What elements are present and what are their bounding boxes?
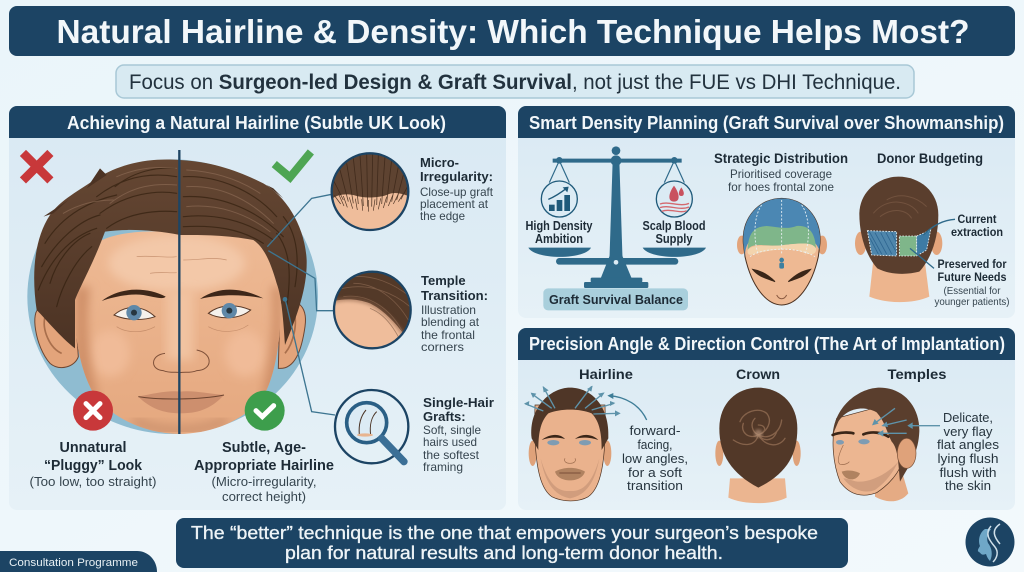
icon: scalp blood supply (656, 181, 692, 217)
inset: temple transition (332, 270, 413, 350)
illustration: crown head (715, 388, 801, 503)
title banner (9, 6, 1015, 56)
conclusion banner: plan for natural results and long-term donor health. (285, 542, 723, 563)
text: delicate flat angles: very flay (944, 425, 993, 439)
text: temple transition: blending at (421, 315, 480, 329)
illustration: top-down head zones (737, 198, 827, 305)
text: forward-facing: facing, (638, 438, 672, 452)
text: single-hair grafts: framing (423, 460, 463, 474)
label: preserved for future needs: Preserved for (938, 257, 1007, 271)
illustration: temples head (833, 388, 940, 501)
illustration: balance scale (528, 146, 955, 310)
caption: subtle hairline: correct height) (222, 490, 306, 504)
icon: green check badge (245, 391, 285, 431)
icon: red cross top (26, 156, 47, 177)
text: forward-facing: forward- (630, 424, 680, 438)
text: strategic distribution (714, 151, 848, 194)
inset: micro-irregularity (330, 150, 410, 232)
label: graft survival balance: Graft Survival Balance (549, 292, 683, 307)
label: hairline: Hairline (579, 367, 634, 382)
text: micro-irregularity (420, 155, 494, 223)
text: delicate flat angles (937, 411, 999, 493)
text: single-hair grafts (423, 395, 494, 474)
text: single-hair grafts: the softest (423, 448, 480, 462)
text: temple transition: the frontal (421, 328, 475, 342)
icon: red cross badge (73, 391, 113, 431)
text: micro-irregularity: Close-up graft (420, 185, 494, 199)
text: forward-facing: transition (627, 479, 683, 493)
tab: consultation programme (0, 551, 157, 572)
inset: single-hair grafts magnifier (335, 390, 408, 463)
text: temple transition (421, 273, 488, 354)
heading: natural hairline: Achieving a Natural Hairline (Subtle UK Look) (67, 112, 446, 133)
text: delicate flat angles: the skin (945, 479, 991, 493)
label: high density ambition: Ambition (535, 232, 583, 246)
pill: graft survival balance (543, 288, 688, 310)
subtitle pill: Focus on Surgeon-led Design & Graft Survival, not just the FUE vs DHI Technique. (129, 70, 901, 94)
panel: precision angle and direction (518, 328, 1015, 510)
illustration: hairline head (524, 386, 647, 501)
text: temple transition: Temple (421, 273, 466, 288)
label: scalp blood supply: Supply (656, 232, 693, 246)
title banner: Natural Hairline & Density: Which Technique Helps Most? (56, 13, 970, 50)
caption: unnatural look: “Pluggy” Look (44, 457, 143, 474)
label: preserved for future needs (934, 257, 1010, 308)
text: single-hair grafts: Single-Hair (423, 395, 494, 410)
illustration: back of head donor zones (855, 177, 955, 302)
text: delicate flat angles: Delicate, (943, 411, 993, 425)
illustration: split face (26, 150, 413, 463)
conclusion banner: The “better” technique is the one that empowers your surgeon’s bespoke (191, 522, 818, 543)
panel: natural hairline (9, 106, 506, 510)
text: delicate flat angles: flush with (940, 466, 997, 480)
caption: unnatural look (30, 439, 156, 489)
label: current extraction (951, 212, 1003, 239)
caption: unnatural look: Unnatural (60, 439, 126, 456)
text: forward-facing (622, 424, 688, 493)
label: high density ambition (526, 219, 593, 246)
label: current extraction: extraction (951, 225, 1003, 239)
caption: subtle hairline: (Micro-irregularity, (212, 475, 316, 489)
icon: density ambition chart (541, 181, 577, 217)
caption: subtle hairline (194, 439, 334, 504)
text: micro-irregularity: the edge (420, 209, 465, 223)
text: micro-irregularity: Irregularity: (420, 169, 493, 184)
label: temples: Temples (888, 367, 946, 382)
tab: consultation programme: Consultation Programme (9, 557, 138, 569)
text: single-hair grafts: Soft, single (423, 423, 481, 437)
text: strategic distribution: Prioritised coverage (730, 167, 832, 181)
text: temple transition: Illustration (421, 303, 476, 317)
conclusion banner (176, 518, 848, 568)
label: current extraction: Current (958, 212, 996, 226)
label: preserved for future needs: Future Needs (938, 270, 1007, 284)
text: forward-facing: low angles, (622, 452, 688, 466)
text: strategic distribution: for hoes frontal zone (728, 180, 834, 194)
text: micro-irregularity: Micro- (420, 155, 459, 170)
caption: subtle hairline: Subtle, Age- (222, 439, 306, 456)
caption: subtle hairline: Appropriate Hairline (194, 457, 334, 474)
icon: logo (966, 518, 1014, 566)
caption: unnatural look: (Too low, too straight) (30, 475, 156, 489)
label: preserved for future needs: younger patients) (934, 297, 1010, 308)
text: temple transition: Transition: (421, 288, 488, 303)
text: delicate flat angles: flat angles (937, 438, 999, 452)
label: preserved for future needs: (Essential for (944, 286, 1001, 297)
connector lines (267, 194, 335, 415)
label: scalp blood supply: Scalp Blood (642, 219, 706, 233)
text: strategic distribution: Strategic Distribution (714, 151, 848, 166)
text: single-hair grafts: Grafts: (423, 409, 466, 424)
label: scalp blood supply (642, 219, 706, 246)
text: temple transition: corners (421, 340, 464, 354)
panel: smart density planning (518, 106, 1015, 318)
text: delicate flat angles: lying flush (938, 452, 999, 466)
label: crown: Crown (736, 367, 780, 382)
text: single-hair grafts: hairs used (423, 435, 477, 449)
text: donor budgeting: Donor Budgeting (877, 151, 983, 166)
label: high density ambition: High Density (526, 219, 593, 233)
text: forward-facing: for a soft (628, 466, 683, 480)
illustration: three head views (524, 386, 940, 503)
text: micro-irregularity: placement at (420, 197, 489, 211)
icon: green check top (277, 155, 308, 177)
